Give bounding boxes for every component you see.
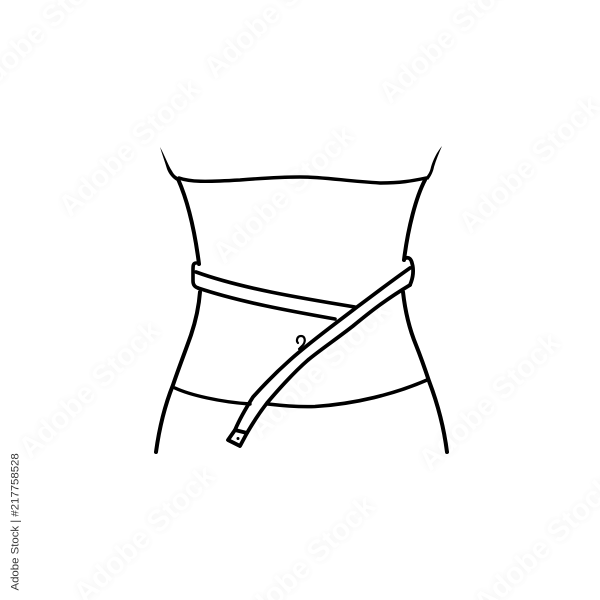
watermark: repeated Adobe Stock text: Adobe Stock [206,119,361,270]
strap upper edge [235,268,410,430]
strap right loop [406,258,413,285]
watermark: repeated Adobe Stock text: Adobe Stock [242,294,397,445]
lower left hip line [156,292,200,452]
watermark: repeated Adobe Stock text: Adobe Stock [412,326,567,477]
band left loop [193,263,198,288]
stock image id text: Adobe Stock | #217758528 [9,453,21,590]
diagonal tape strap [228,258,413,446]
band upper edge [196,272,355,307]
lower right hip line [403,292,447,452]
tape band across back [193,263,355,319]
left side of upper torso [178,179,199,264]
strap lower edge [247,285,410,433]
tape end hole [237,438,239,440]
band lower edge [198,288,335,319]
left shoulder tip [160,147,180,181]
tape end tab [228,430,247,446]
watermark: repeated Adobe Stock text: Adobe Stock [52,72,207,223]
watermark: repeated Adobe Stock text: Adobe Stock [12,314,167,465]
right side of upper torso [404,180,425,260]
top edge of garment [179,177,426,183]
waistline left segment [175,388,250,404]
navel [297,336,305,349]
waistline right segment [268,380,427,407]
right shoulder tip [425,146,442,180]
